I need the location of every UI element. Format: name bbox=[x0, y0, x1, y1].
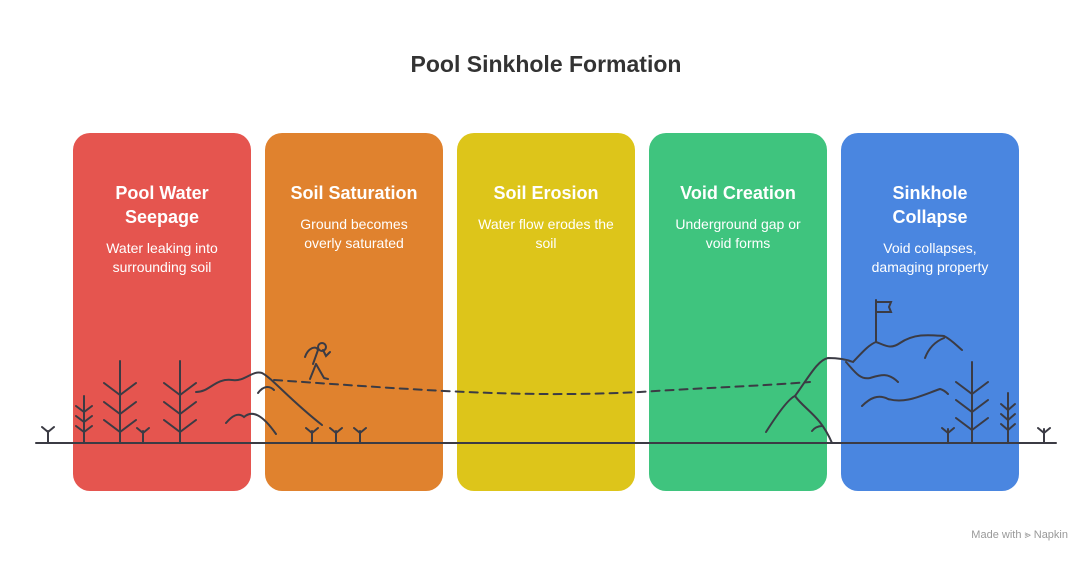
sprouts bbox=[42, 427, 1050, 443]
dashed line bbox=[274, 380, 810, 394]
card: pool water seepage: Seepage bbox=[125, 207, 199, 227]
card: void creation: void forms bbox=[706, 235, 770, 251]
card: pool water seepage: Pool Water bbox=[115, 183, 209, 203]
card: pool water seepage bbox=[73, 133, 251, 491]
card: pool water seepage: surrounding soil bbox=[113, 259, 211, 275]
hills left bbox=[196, 373, 322, 425]
title: Pool Sinkhole Formation bbox=[411, 51, 681, 77]
card: soil erosion: soil bbox=[535, 235, 556, 251]
card: sinkhole collapse: Void collapses, bbox=[883, 240, 977, 256]
card: soil erosion: Water flow erodes the bbox=[478, 216, 614, 232]
card: void creation bbox=[649, 133, 827, 491]
card: sinkhole collapse bbox=[841, 133, 1019, 491]
card: sinkhole collapse: Collapse bbox=[892, 207, 968, 227]
trees left bbox=[76, 396, 92, 443]
card: sinkhole collapse: damaging property bbox=[872, 259, 988, 275]
footer credit: Made with ⪢ Napkin bbox=[971, 529, 1068, 541]
card: pool water seepage: Water leaking into bbox=[106, 240, 218, 256]
right mountain bbox=[766, 396, 832, 443]
card: sinkhole collapse: Sinkhole bbox=[892, 183, 968, 203]
card: soil erosion: Soil Erosion bbox=[493, 183, 598, 203]
card: soil saturation: overly saturated bbox=[304, 235, 404, 251]
card: soil saturation: Soil Saturation bbox=[290, 183, 418, 203]
card: soil saturation: Ground becomes bbox=[300, 216, 408, 232]
card: void creation: Underground gap or bbox=[675, 216, 801, 232]
card: soil erosion bbox=[457, 133, 635, 491]
hiker bbox=[305, 348, 330, 379]
card: void creation: Void Creation bbox=[680, 183, 796, 203]
card: soil saturation bbox=[265, 133, 443, 491]
